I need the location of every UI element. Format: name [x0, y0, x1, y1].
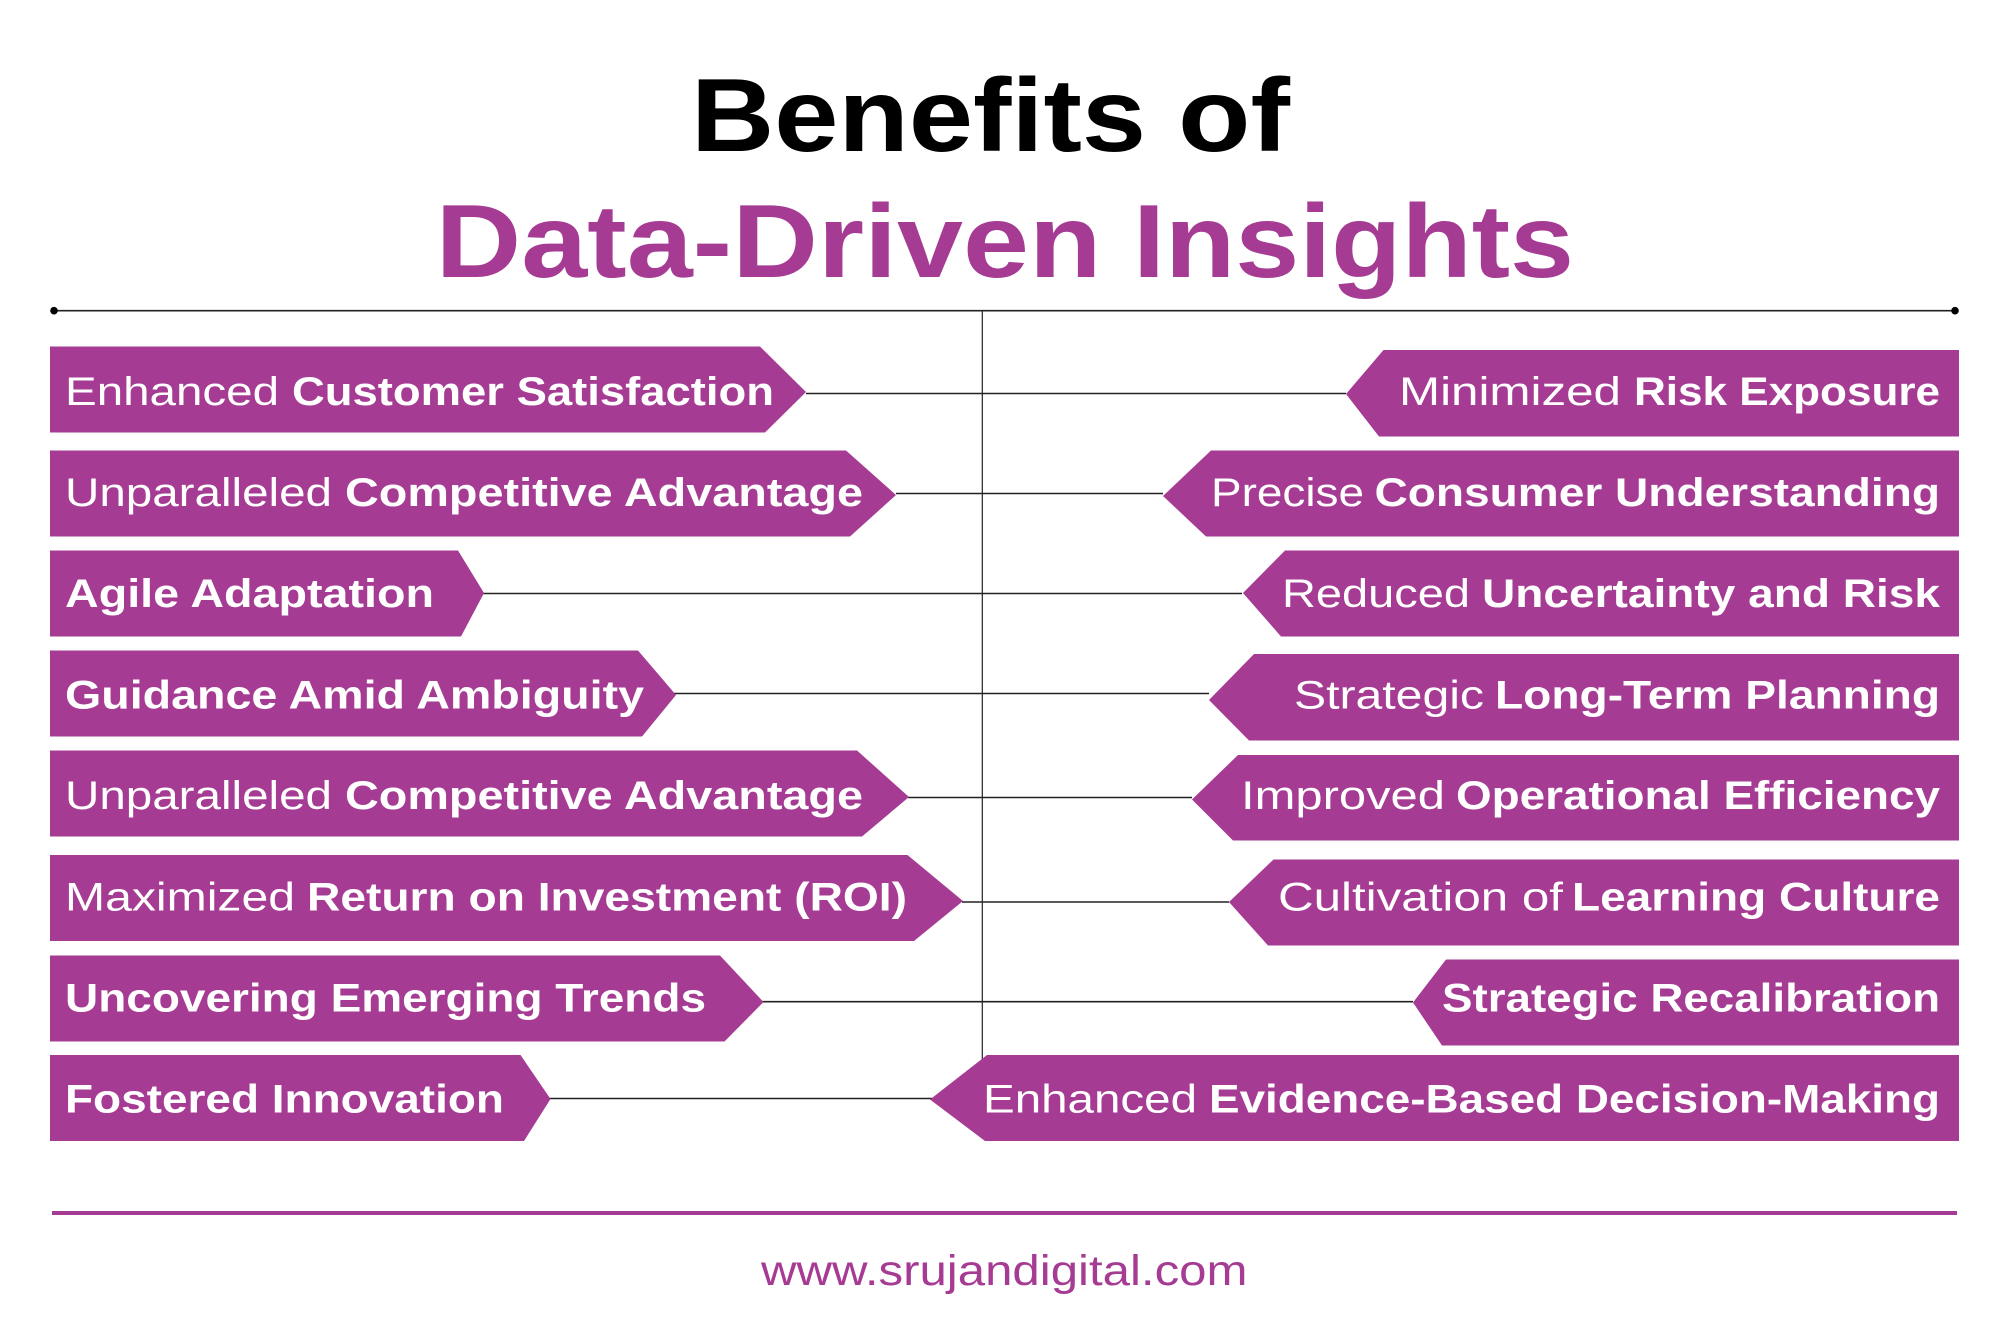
left tag: Enhanced Customer Satisfaction: Customer Satisfaction	[292, 370, 774, 414]
right tag: Cultivation of Learning Culture	[1229, 860, 1959, 946]
footer website: www.srujandigital.com	[760, 1247, 1248, 1295]
right tag: Precise Consumer Understanding	[1163, 450, 1959, 536]
title	[436, 58, 1574, 300]
right tag: Minimized Risk Exposure: Risk Exposure	[1634, 370, 1940, 414]
left tag: Guidance Amid Ambiguity: Guidance Amid Ambiguity	[65, 674, 645, 718]
left tag: Maximized Return on Investment (ROI)	[50, 855, 963, 941]
connector lines	[483, 394, 1413, 1098]
right tag: Precise Consumer Understanding: Precise	[1211, 471, 1364, 515]
title: Data-Driven	[436, 184, 1102, 300]
left tag: Unparalleled Competitive Advantage (second)	[50, 750, 909, 836]
right tag: Enhanced Evidence-Based Decision-Making: Evidence-Based Decision-Making	[1209, 1078, 1940, 1122]
central vertical line	[981, 311, 983, 1064]
left tag: Agile Adaptation	[50, 550, 484, 636]
top divider with end dots	[50, 307, 1959, 315]
title: Benefits	[691, 58, 1146, 174]
right tag: Improved Operational Efficiency: Improved	[1241, 774, 1445, 818]
left tag: Enhanced Customer Satisfaction: Enhanced	[65, 370, 279, 414]
left tag: Enhanced Customer Satisfaction	[50, 346, 806, 432]
right tag: Cultivation of Learning Culture: Learning Culture	[1572, 876, 1940, 920]
left tag: Unparalleled Competitive Advantage: Competitive Advantage	[345, 471, 863, 515]
right tag: Precise Consumer Understanding: Consumer Understanding	[1374, 471, 1940, 515]
right tag: Reduced Uncertainty and Risk: Uncertainty and Risk	[1482, 572, 1941, 616]
right tag: Strategic Recalibration: Strategic Recalibration	[1442, 976, 1940, 1020]
left tag: Fostered Innovation	[50, 1055, 550, 1141]
right tag: Reduced Uncertainty and Risk: Reduced	[1282, 572, 1470, 616]
right tag: Enhanced Evidence-Based Decision-Making: Enhanced	[983, 1078, 1197, 1122]
left tag: Unparalleled Competitive Advantage	[50, 450, 896, 536]
right tag: Enhanced Evidence-Based Decision-Making	[930, 1055, 1959, 1141]
title: Insights	[1133, 184, 1574, 300]
right tag: Strategic Long-Term Planning: Strategic	[1294, 674, 1484, 718]
left tag: Uncovering Emerging Trends: Uncovering Emerging Trends	[65, 976, 706, 1020]
left tag: Guidance Amid Ambiguity	[50, 650, 676, 736]
left tag: Maximized Return on Investment (ROI): Return on Investment (ROI)	[307, 876, 907, 920]
right tag: Minimized Risk Exposure	[1346, 350, 1959, 436]
right tag: Strategic Long-Term Planning: Long-Term Planning	[1495, 674, 1940, 718]
right tag: Strategic Long-Term Planning	[1209, 654, 1959, 740]
right tag: Strategic Recalibration	[1413, 960, 1959, 1046]
title: of	[1178, 58, 1290, 174]
left tag: Maximized Return on Investment (ROI): Maximized	[65, 876, 295, 920]
right tag: Reduced Uncertainty and Risk	[1243, 550, 1959, 636]
footer rule	[52, 1211, 1957, 1215]
left tag: Agile Adaptation: Agile Adaptation	[65, 572, 434, 616]
left tag: Uncovering Emerging Trends	[50, 956, 764, 1042]
left tag: Unparalleled Competitive Advantage (second): Unparalleled	[65, 774, 332, 818]
left tag: Unparalleled Competitive Advantage: Unparalleled	[65, 471, 332, 515]
right tag: Cultivation of Learning Culture: Cultivation of	[1278, 876, 1564, 920]
left tag: Fostered Innovation: Fostered Innovation	[65, 1078, 504, 1122]
right tag: Improved Operational Efficiency: Operational Efficiency	[1456, 774, 1941, 818]
right tag: Improved Operational Efficiency	[1192, 755, 1959, 840]
right tag: Minimized Risk Exposure: Minimized	[1399, 370, 1621, 414]
left tag: Unparalleled Competitive Advantage (second): Competitive Advantage	[345, 774, 863, 818]
